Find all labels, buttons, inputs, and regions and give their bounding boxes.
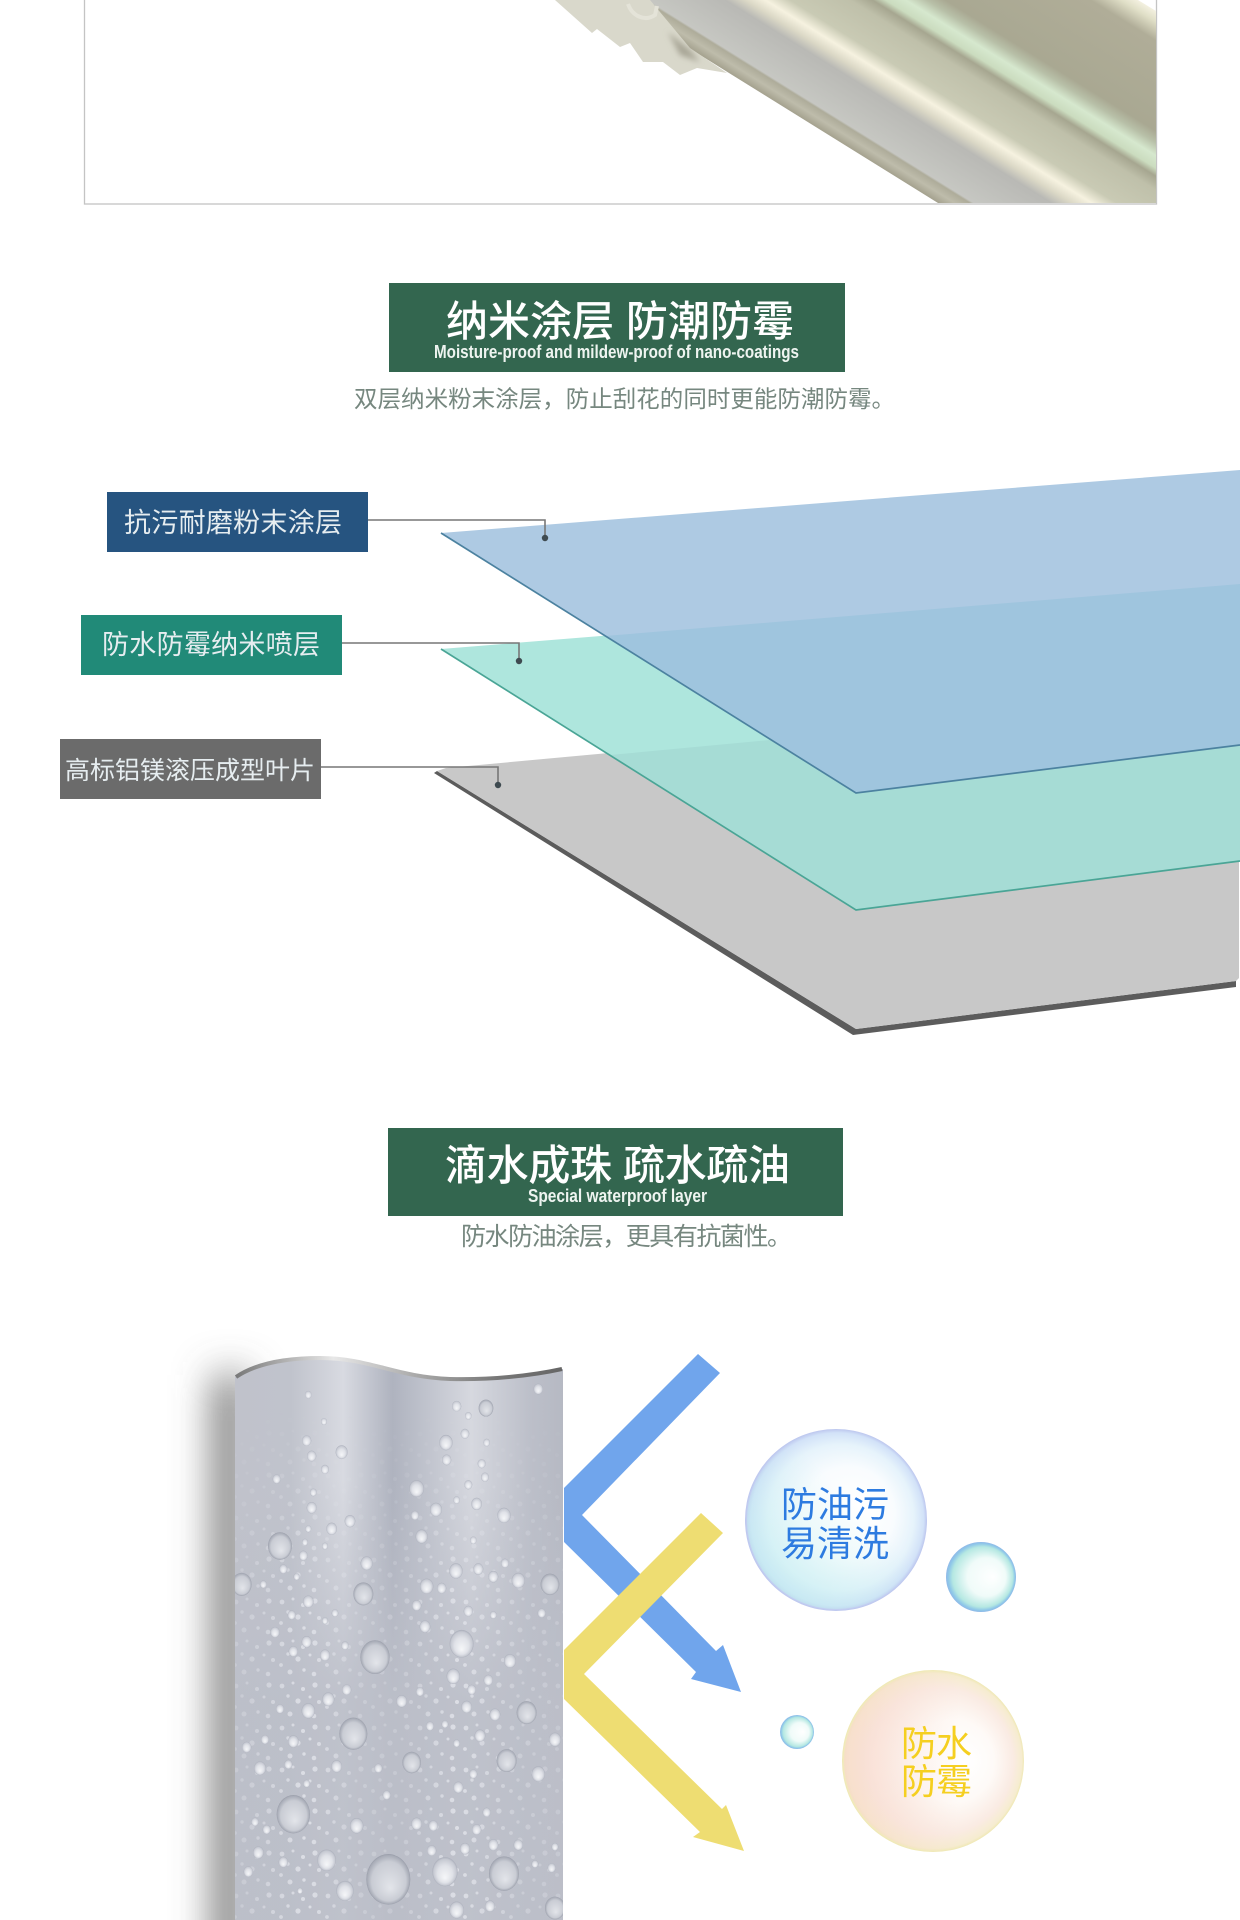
label: aluminium base callout: 高标铝镁滚压成型叶片 (65, 757, 315, 785)
section heading: nano coating: Moisture-proof and mildew-proof of nano-coatings (434, 342, 799, 362)
label: nano spray callout: 防水防霉纳米喷层 (102, 630, 320, 660)
gathered fabric and ring (555, 0, 727, 75)
panel: top curtain rail photo (84, 0, 1156, 204)
bubble: water and mildew proof (842, 1670, 1024, 1852)
bubble: oil-proof easy clean (745, 1429, 927, 1611)
panel: slat with water droplets (215, 1350, 565, 1920)
label: powder coating callout (107, 492, 548, 552)
droplets (232, 1384, 565, 1920)
bubble: water and mildew proof: 防霉 (901, 1761, 972, 1802)
bubble: oil-proof easy clean: 防油污 (781, 1484, 889, 1525)
section heading: water beading: 滴水成珠 疏水疏油 (445, 1142, 790, 1189)
section heading: nano coating (389, 283, 845, 372)
label: nano spray callout (81, 615, 522, 675)
label: powder coating callout: 抗污耐磨粉末涂层 (124, 508, 342, 538)
arrow: yellow (564, 1513, 744, 1851)
section heading: water beading (388, 1128, 843, 1216)
arrow: blue (564, 1354, 741, 1692)
bubble: tiny teal (780, 1715, 814, 1749)
bubble: small teal (946, 1542, 1016, 1612)
layer: aluminium base (434, 695, 1239, 1035)
bubble: oil-proof easy clean: 易清洗 (781, 1523, 889, 1564)
metal top edge (236, 1358, 562, 1379)
layer: nano spray (441, 584, 1240, 910)
curtain headrail (612, 0, 1156, 203)
section heading: nano coating: 纳米涂层 防潮防霉 (446, 298, 794, 345)
section heading: water beading: Special waterproof layer (528, 1186, 707, 1206)
label: aluminium base callout (60, 739, 501, 799)
layer: powder coating (441, 470, 1240, 793)
bubble: water and mildew proof: 防水 (901, 1723, 972, 1764)
description: water beading: 防水防油涂层，更具有抗菌性。 (461, 1223, 792, 1251)
description: nano coating: 双层纳米粉末涂层，防止刮花的同时更能防潮防霉。 (354, 386, 895, 412)
layered sheets diagram (434, 470, 1240, 1035)
